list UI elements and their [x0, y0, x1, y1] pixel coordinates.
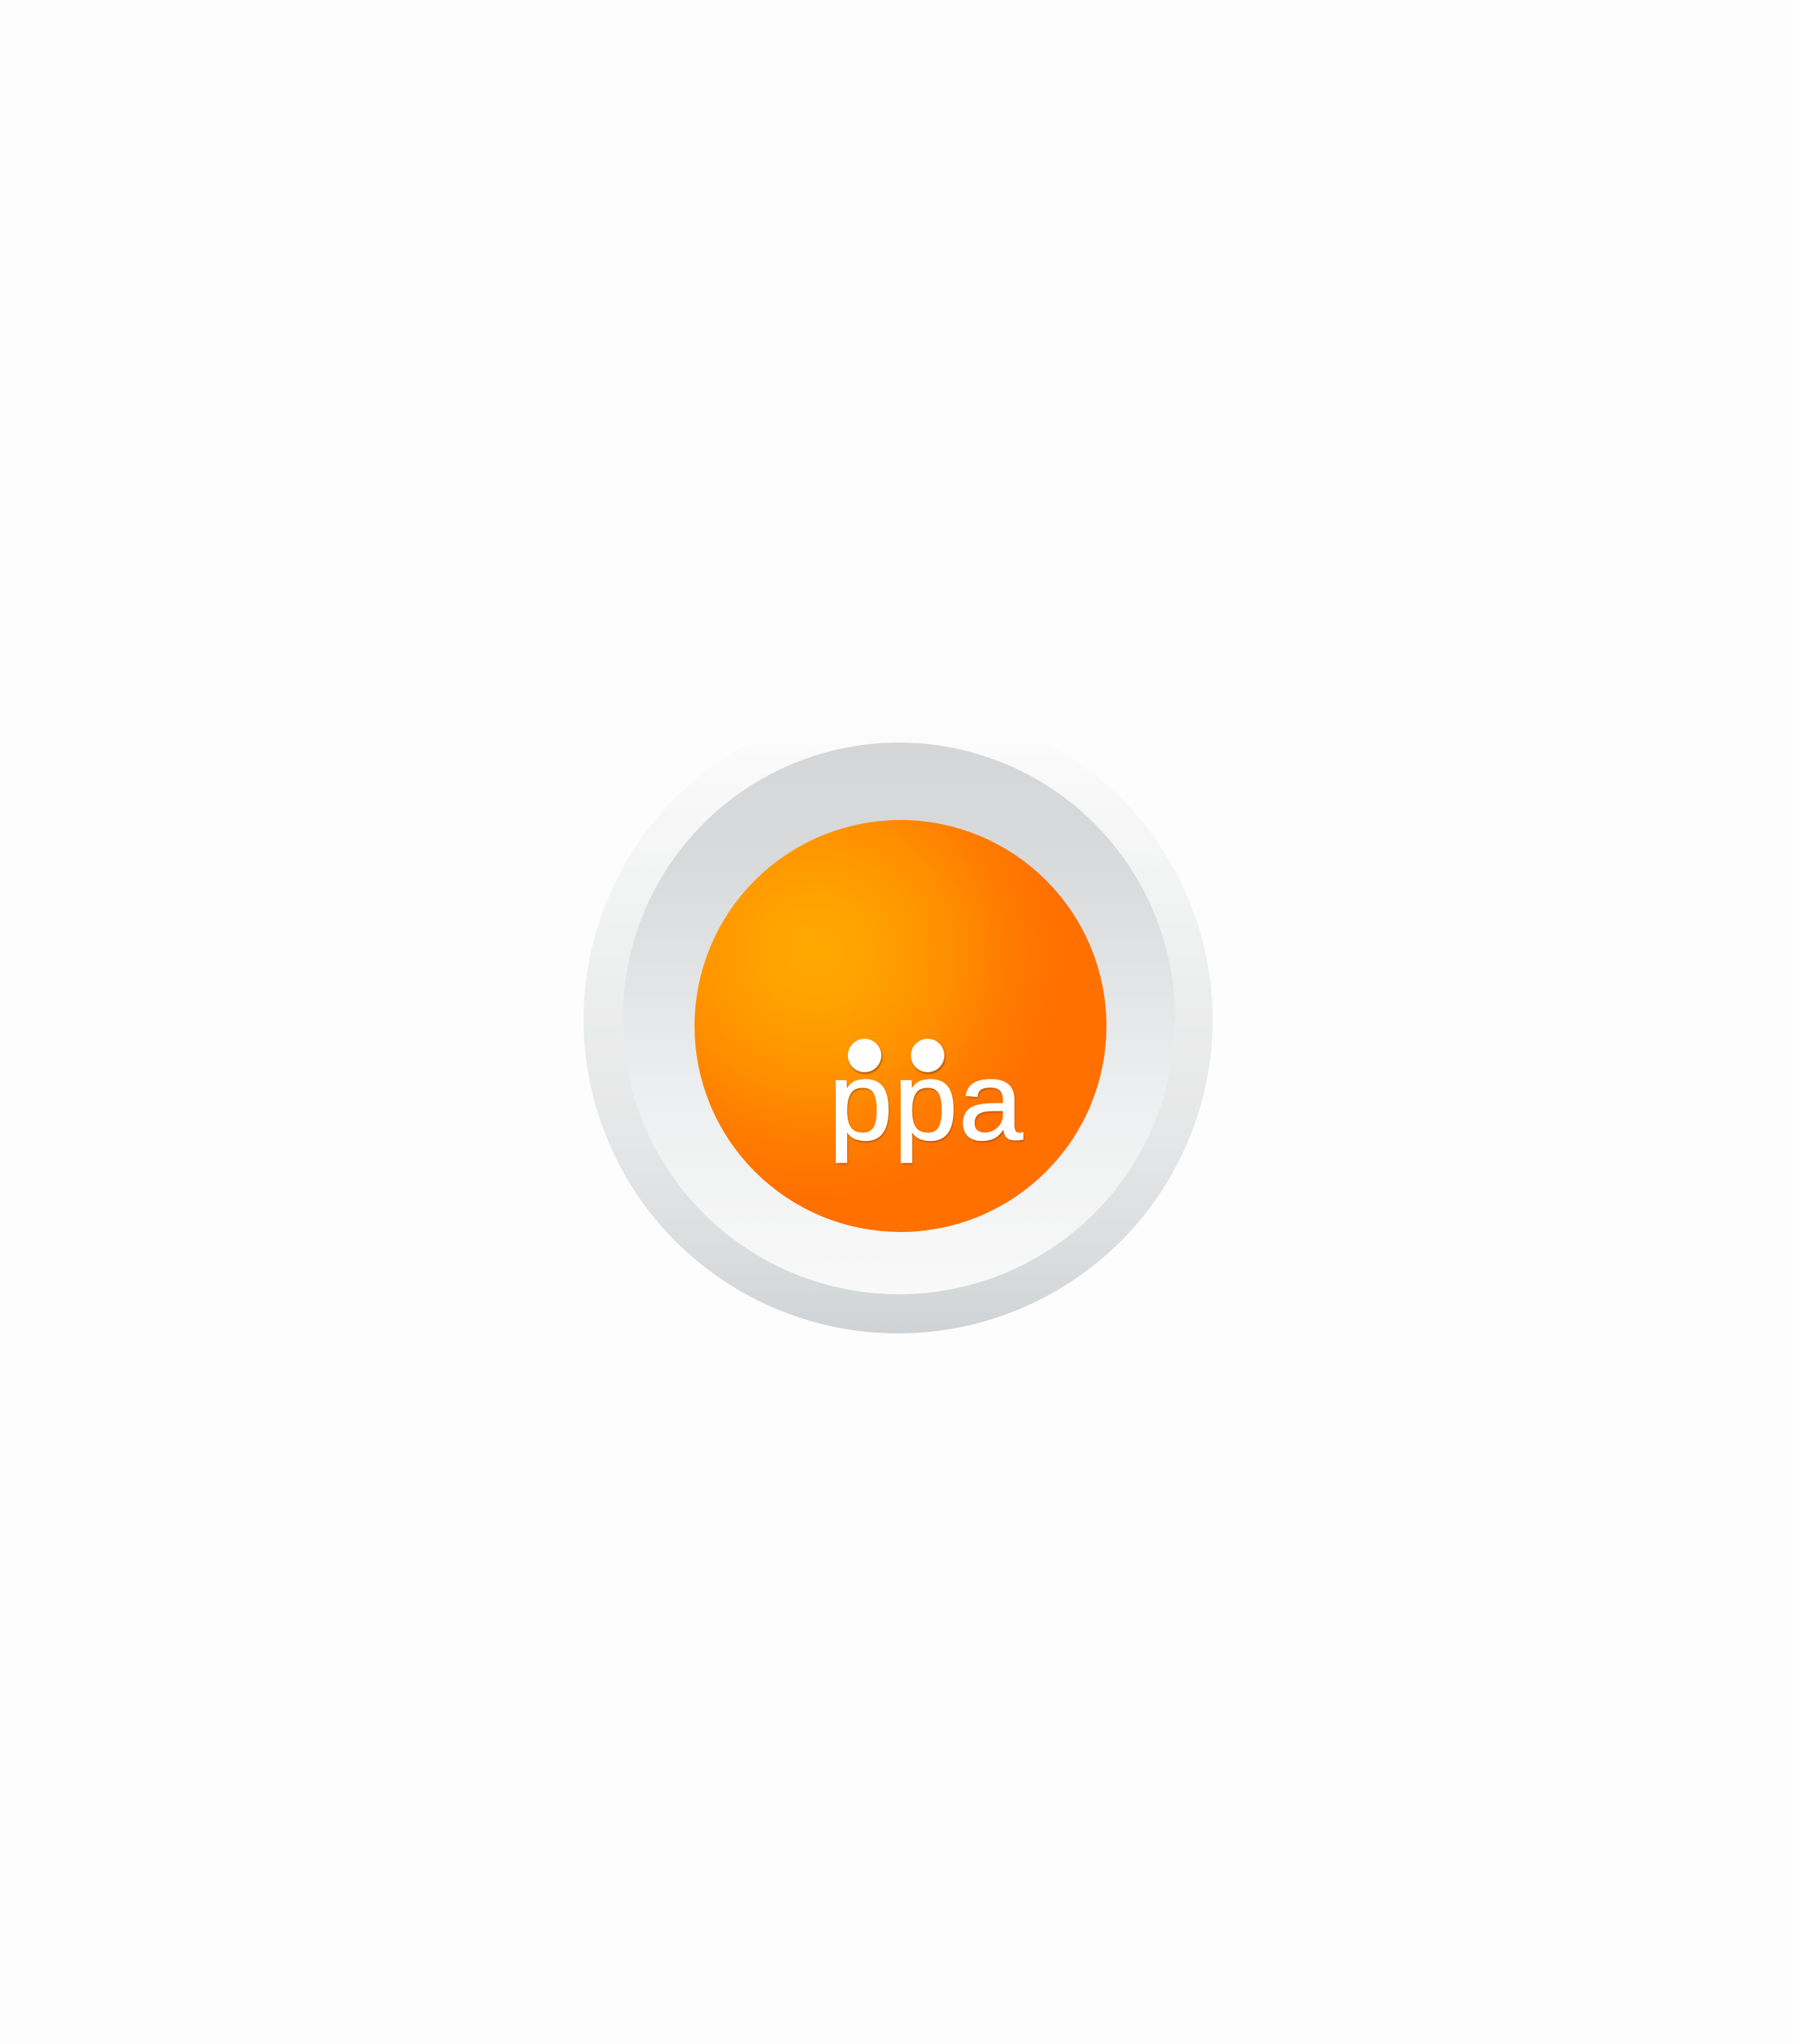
outer ring: [584, 706, 1213, 1333]
inner ring: [623, 743, 1175, 1294]
logo: head dot left: [848, 1039, 881, 1072]
logo: head dot right: [911, 1039, 944, 1072]
logo wordmark: ppa: [829, 1040, 1023, 1163]
orange disc: [695, 820, 1106, 1232]
